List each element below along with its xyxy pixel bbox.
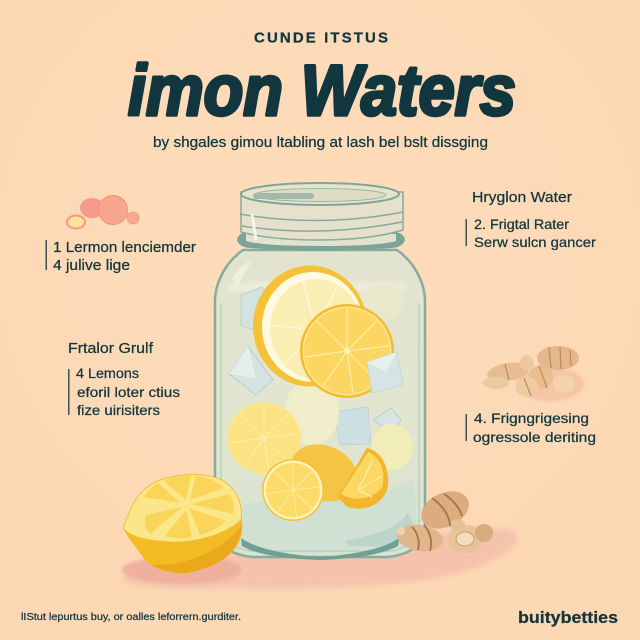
text block: left middle: Frtalor Grulf (68, 340, 154, 357)
pale lemon slices in back (285, 284, 413, 470)
text block: left middle: eforil loter ctius (77, 384, 180, 400)
text block: left top: 4 julive lige (53, 258, 130, 274)
jar collar (237, 232, 405, 250)
footer (21, 608, 618, 627)
lemon wedge (338, 448, 388, 509)
text block: right bottom: ogressole deriting (473, 429, 596, 445)
ice cubes (229, 287, 401, 445)
jar body (215, 250, 425, 557)
eyebrow heading: CUNDE ITSTUS (254, 30, 388, 46)
water bottom (224, 478, 417, 549)
text block: right top: Hryglon Water (472, 189, 572, 206)
shadow (122, 556, 242, 584)
jar shoulder shine (232, 260, 252, 285)
large pale lemon slice (253, 266, 367, 386)
ice cube in front of slice (367, 352, 403, 393)
segments (144, 476, 234, 538)
text block: right top: Serw sulcn gancer (474, 234, 596, 250)
icon: pink bubbles (67, 196, 139, 228)
text block: right bottom: 4. Frigngrigesing (474, 410, 589, 426)
lemon chunk (281, 434, 367, 512)
jar (215, 183, 425, 560)
rind (123, 475, 242, 573)
text block: right bottom (466, 410, 596, 445)
text block: right top: 2. Frigtal Rater (474, 216, 569, 232)
brand name: buitybetties (518, 608, 618, 627)
orange-yellow lemon slice (300, 304, 394, 398)
lower left lemon slice (227, 402, 301, 474)
header (128, 30, 516, 151)
water surface (228, 281, 408, 293)
jar base rim (241, 538, 399, 560)
cut face (123, 475, 241, 542)
text block: left middle (68, 340, 180, 418)
subtitle: by shgales gimou ltabling at lash bel bslt dissging (153, 134, 488, 151)
text block: left middle: fize uirisiters (77, 402, 160, 418)
icon: cut lemon half (122, 475, 242, 584)
icon: ginger root by jar (395, 484, 493, 554)
floor shadow (122, 529, 518, 588)
text block: left middle: 4 Lemons (76, 365, 139, 381)
icon: ginger root upper right (483, 346, 584, 401)
text block: right top (466, 189, 596, 250)
text block: left top (46, 240, 196, 274)
footer note: lIStut lepurtus buy, or oalles leforrern.gurditer. (21, 611, 241, 623)
text block: left top: 1 Lermon lenciemder (53, 240, 196, 256)
jar lid (240, 183, 403, 240)
small lemon slice (262, 459, 324, 521)
main title: imon Waters (128, 52, 516, 131)
